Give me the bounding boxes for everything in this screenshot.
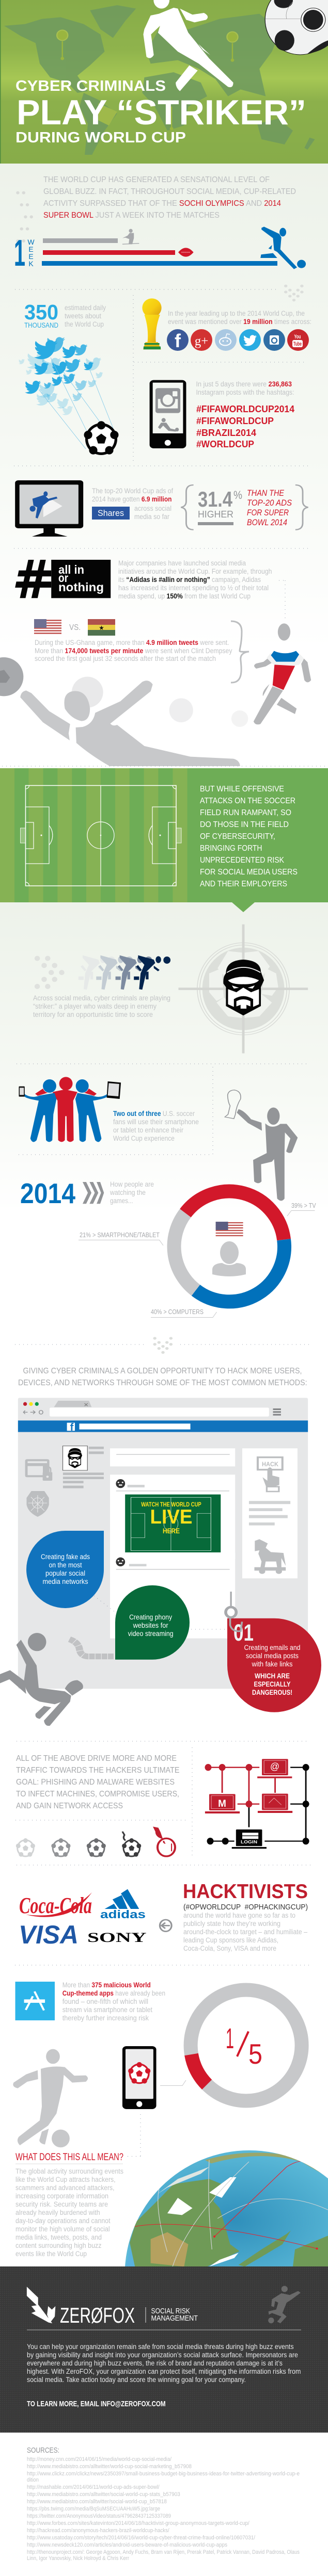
- donut chart: one fifth: [191, 1990, 302, 2101]
- title: PLAY “STRIKER”: [17, 93, 306, 132]
- text: laptop labels: LOGIN: [241, 1840, 257, 1844]
- callout: fake links: social media posts: [246, 1652, 299, 1660]
- callout: fake links: [227, 1618, 321, 1712]
- text: instagram hashtags: #BRAZIL2014: [196, 428, 256, 438]
- bar chart: 1 week comparison: 1: [14, 233, 25, 274]
- stat: 350 thousand: THOUSAND: [24, 321, 58, 329]
- stat: 350 thousand: [24, 300, 106, 329]
- text: top-20 ads shares: 2014 have gotten 6.9 million: [92, 495, 171, 503]
- bracket: [231, 621, 249, 683]
- callout: 31.4% higher: TOP-20 ADS: [247, 498, 292, 508]
- title: DURING WORLD CUP: [15, 129, 186, 146]
- panel: world cup buzz: [0, 164, 328, 770]
- text: offensive attacks: BUT WHILE OFFENSIVE: [200, 785, 284, 793]
- callout: phony websites: video streaming: [128, 1630, 174, 1638]
- text: ultimate goal: TO INFECT MACHINES, COMPROMISE USERS,: [16, 1790, 179, 1799]
- panel: zerofox footer: [0, 2266, 328, 2433]
- text: instagram hashtags: Instagram posts with the hashtags:: [196, 388, 294, 396]
- bar chart: 1 week comparison: [14, 226, 306, 274]
- callout: phony websites: Creating phony: [129, 1613, 172, 1621]
- text: malicious apps: [63, 1981, 165, 2022]
- logos: world cup sponsors: Coca-Cola: [19, 1893, 92, 1918]
- text: global activity: media links, tweets, posts, and: [15, 2233, 102, 2241]
- illustration: globe with attack lines: [119, 2146, 328, 2270]
- social media icons: g+: [195, 334, 208, 348]
- text: striker definition: [33, 994, 170, 1018]
- flag: united states: [216, 1222, 243, 1237]
- callout: 31.4% higher: THAN THE: [247, 488, 285, 498]
- panel: hero header: [0, 0, 328, 164]
- panel: sidebar ads: [242, 1448, 298, 1578]
- text: hacktivists: Coca-Cola, Sony, VISA and more: [183, 1945, 276, 1952]
- callout: fake links: DANGEROUS!: [252, 1689, 292, 1696]
- text: call to action: social media. Take action today and score the winning goal for your company.: [27, 2376, 246, 2384]
- text: offensive attacks: [200, 785, 298, 888]
- shares button: Shares: [98, 508, 124, 518]
- text: ultimate goal: AND GAIN NETWORK ACCESS: [16, 1802, 123, 1810]
- icon: soccer ball: [84, 421, 118, 455]
- text: adidas campaign: its “Adidas is #allin or nothing” campaign, Adidas: [118, 576, 261, 584]
- text: offensive attacks: ATTACKS ON THE SOCCER: [200, 797, 295, 805]
- text: ultimate goal: ALL OF THE ABOVE DRIVE MORE AND MORE: [16, 1754, 177, 1763]
- callout: fake links: with fake links: [252, 1660, 293, 1668]
- text: laptop labels: [218, 1761, 279, 1844]
- text: adidas campaign: has increased its internet spending to ½ of their total: [118, 584, 269, 592]
- logos: world cup sponsors: VISA: [19, 1920, 79, 1949]
- label: tv share: 39% > TV: [291, 1202, 316, 1209]
- text: global activity: content surrounding high buzz: [15, 2242, 102, 2249]
- text: call to action: [27, 2343, 301, 2384]
- heading: golden opportunity: [18, 1367, 307, 1387]
- callout: fake links: Creating emails and: [244, 1644, 301, 1651]
- logo: all in or nothing: or: [58, 571, 68, 585]
- text: us-ghana game: scored the first goal just 32 seconds after the start of the match: [35, 655, 216, 662]
- panel: sources: http://www.mediabistro.com/alltwitter/social-world-cup_b57818: [27, 2499, 167, 2505]
- logo: zerofox: SOCIAL RISK: [151, 2307, 190, 2315]
- illustration: flock of twitter birds lifting a ball: [19, 337, 118, 455]
- illustration: goalkeeper: [0, 657, 248, 770]
- stat: 2014: How people are: [110, 1180, 154, 1188]
- icon: falling player: [0, 1633, 83, 1726]
- icon: app store: [15, 1982, 55, 2020]
- text: call to action: You can help your organization remain safe from social media threats during high buzz events: [27, 2343, 294, 2351]
- text: global activity: day-to-day operations and cannot: [15, 2217, 111, 2225]
- icon: smartphone with instagram: [150, 380, 186, 448]
- bar chart: 1 week comparison: K: [28, 260, 34, 268]
- icon: person: [212, 1241, 246, 1276]
- icon: web shield: [26, 1491, 49, 1517]
- stat: 350 thousand: tweets about: [65, 312, 101, 320]
- panel: news feed post one: [110, 1448, 235, 1466]
- social media icons: [167, 329, 309, 351]
- text: two out of three: Two out of three U.S. soccer: [113, 1110, 195, 1117]
- donut chart: one fifth: 5: [248, 2038, 262, 2070]
- flag: united states: [34, 619, 61, 636]
- stat: 2014: [20, 1177, 154, 1209]
- icon: hacker avatar: [68, 1448, 82, 1468]
- icon: white kicking player: [143, 0, 233, 91]
- icon: trojan horse: [254, 1539, 286, 1574]
- text: global activity: security risk. Security teams are: [15, 2200, 108, 2208]
- intro text: THE WORLD CUP HAS GENERATED A SENSATIONAL LEVEL OF: [43, 175, 270, 184]
- icon: worm: [69, 1639, 114, 1657]
- callout: fake links: ESPECIALLY: [254, 1680, 290, 1688]
- logo: zerofox: ZERØFOX: [60, 2303, 135, 2327]
- text: hacktivists: publicly state how they’re working: [183, 1920, 280, 1927]
- heading: golden opportunity: GIVING CYBER CRIMINALS A GOLDEN OPPORTUNITY TO HACK MORE USERS,: [23, 1367, 302, 1375]
- text: offensive attacks: FOR SOCIAL MEDIA USERS: [200, 868, 298, 877]
- intro text: ACTIVITY SURPASSED THAT OF THE SOCHI OLYMPICS AND 2014: [43, 199, 281, 208]
- text: malicious apps: stream via smartphone or tablet: [63, 2006, 152, 2014]
- text: malicious apps: More than 375 malicious World: [63, 1981, 151, 1989]
- icon: kicking player: [13, 2049, 88, 2147]
- callout: fake ads: popular social: [45, 1569, 85, 1577]
- text: global activity: events like the World Cup: [15, 2250, 87, 2258]
- stat: 2014: games...: [110, 1197, 133, 1205]
- text: instagram hashtags: #FIFAWORLDCUP2014: [196, 404, 294, 414]
- text: hacktivists: HACKTIVISTS: [183, 1881, 308, 1903]
- panel: sources: http://www.mediabistro.com/alltwitter/world-cup-social-marketing_b57908: [27, 2464, 192, 2470]
- text: us-ghana game: More than 174,000 tweets per minute were sent when Clint Dempsey: [35, 647, 232, 655]
- icon: blue player: [260, 226, 306, 269]
- text: ultimate goal: GOAL: PHISHING AND MALWARE WEBSITES: [16, 1778, 175, 1787]
- map pins: [57, 30, 238, 130]
- callout: fake ads: media networks: [42, 1578, 88, 1585]
- label: smartphone tablet share: [79, 1231, 163, 1245]
- stat: 2014: 2014: [20, 1177, 75, 1209]
- text: offensive attacks: BRINGING FORTH: [200, 844, 262, 853]
- text: global activity: already heavily burdened with: [15, 2209, 100, 2216]
- text: offensive attacks: DO THOSE IN THE FIELD: [200, 820, 289, 829]
- logos: world cup sponsors: SONY: [87, 1930, 147, 1945]
- text: live stream ad: WATCH THE WORLD CUP: [141, 1501, 201, 1508]
- text: top-20 ads shares: media so far: [134, 513, 169, 521]
- text: striker definition: territory for an opportunistic time to score: [33, 1011, 153, 1018]
- panel: sources: [27, 2446, 300, 2562]
- icon: fishing hook: [226, 1592, 242, 1631]
- panel: sources: Linn, Igor Yanovskiy, Nick Holroyd & Chris Kerr: [27, 2555, 129, 2562]
- logo: all in or nothing: all in: [58, 563, 84, 576]
- intro text: GLOBAL BUZZ. IN FACT, THROUGHOUT SOCIAL MEDIA, CUP-RELATED: [43, 187, 296, 196]
- text: hacktivists: (#OPWORLDCUP #OPHACKINGCUP): [183, 1903, 308, 1911]
- icon: credit card lock: [25, 1459, 52, 1481]
- text: hack button: HACK: [262, 1461, 278, 1468]
- flag: ghana: [88, 619, 115, 636]
- icon: chevrons: [83, 1182, 104, 1204]
- panel: browser mockup: [18, 1398, 308, 1689]
- icon: american football: [178, 248, 194, 257]
- text: call to action: everywhere and during high buzz events, the risk of brand and reputation damage is at it’s: [27, 2359, 283, 2367]
- diagram: compromised network: [205, 1759, 309, 1849]
- icon: player holding trophy: [225, 1090, 298, 1201]
- flag: ghana: ★: [99, 624, 104, 631]
- donut chart: one fifth: 1: [226, 2022, 234, 2054]
- intro text: SUPER BOWL JUST A WEEK INTO THE MATCHES: [43, 211, 220, 220]
- panel: browser mockup: f: [70, 1422, 74, 1433]
- bar chart: 1 week comparison: E: [28, 245, 34, 253]
- social media icons: You: [294, 334, 301, 340]
- text: 19 million mentions: In the year leading up to the 2014 World Cup, the: [168, 310, 305, 317]
- logo: zerofox: MANAGEMENT: [151, 2314, 198, 2323]
- panel: sources: SOURCES:: [27, 2446, 59, 2455]
- text: global activity: The global activity surrounding events: [15, 2167, 123, 2175]
- icon: hacker in crosshair on soccer ball: [178, 925, 308, 1054]
- icon: soccer ball: [265, 0, 328, 55]
- text: adidas campaign: [118, 559, 272, 600]
- text: laptop labels: M: [218, 1799, 226, 1809]
- text: top-20 ads shares: The top-20 World Cup ads of: [92, 487, 173, 495]
- text: striker definition: Across social media, cyber criminals are playing: [33, 994, 170, 1002]
- text: offensive attacks: OF CYBERSECURITY,: [200, 832, 275, 841]
- text: 19 million mentions: event was mentioned over 19 million times across:: [168, 318, 311, 326]
- callout: 31.4% higher: [181, 485, 308, 530]
- text: global activity: scammers and advanced attackers,: [15, 2184, 115, 2192]
- text: hacktivists: leading Cup sponsors like Adidas,: [183, 1936, 278, 1944]
- intro text: [43, 175, 296, 220]
- callout: fake ads: Creating fake ads: [41, 1553, 90, 1561]
- panel: sources: https://pbs.twimg.com/media/BqSuMSECUAAHuW5.jpg:large: [27, 2506, 160, 2512]
- text: instagram hashtags: [196, 380, 294, 449]
- panel: sources: http://www.clickz.com/clickz/news/2350397/small-business-budget-big-business-ideas-for-twitter-advertising-world-cup-e: [27, 2471, 300, 2477]
- shares button: [92, 507, 130, 520]
- label: computers share: 40% > COMPUTERS: [151, 1308, 204, 1316]
- panel: sources: dition: [27, 2477, 39, 2483]
- pitch stripes: [0, 768, 187, 902]
- text: adidas campaign: media spend, up 150% from the last World Cup: [118, 592, 251, 600]
- text: global activity: like the World Cup attracts hackers,: [15, 2176, 116, 2183]
- text: 19 million mentions: [168, 310, 311, 326]
- heading: what does this all mean: WHAT DOES THIS ALL MEAN?: [15, 2152, 123, 2163]
- text: malicious apps: found – one-fifth of which will: [63, 1998, 148, 2005]
- text: global activity: [15, 2167, 123, 2258]
- logo: all in or nothing: [15, 560, 111, 598]
- stat: 350 thousand: estimated daily: [65, 304, 106, 312]
- icon: tv with player: [15, 480, 83, 537]
- panel: sources: http://mashable.com/2014/06/11/world-cup-ads-super-bowl/: [27, 2484, 160, 2490]
- text: ultimate goal: [16, 1754, 180, 1810]
- callout: fake ads: [26, 1531, 104, 1608]
- panel: news feed post two with fake ad: [110, 1475, 235, 1559]
- callout: fake links: 01: [233, 1619, 254, 1646]
- callout: 31.4% higher: HIGHER: [198, 509, 233, 520]
- text: malicious apps: thereby further increasing risk: [63, 2014, 149, 2022]
- text: two out of three: or tablet to enhance their: [113, 1126, 183, 1134]
- icon: red soccer ball: [128, 2062, 150, 2084]
- arrow: hacktivists target sponsors: [160, 1920, 171, 1932]
- social media icons: f: [175, 330, 181, 351]
- stat: 2014: watching the: [110, 1189, 146, 1196]
- text: instagram hashtags: #FIFAWORLDCUP: [196, 416, 274, 426]
- text: global activity: increasing corporate information: [15, 2192, 108, 2200]
- icon row: balls turning into bombs: [16, 1827, 175, 1857]
- text: email contact: TO LEARN MORE, EMAIL INFO@ZEROFOX.COM: [27, 2400, 166, 2408]
- donut chart: how people watch: [79, 1191, 316, 1318]
- decorative chevron dots: [35, 956, 65, 989]
- text: offensive attacks: FIELD RUN RAMPANT, SO: [200, 808, 291, 817]
- pitch markings: [21, 785, 181, 886]
- text: top-20 ads shares: [92, 487, 173, 521]
- text: live stream ad: [141, 1501, 201, 1535]
- text: call to action: highest. With ZeroFOX, your organization can protect itself, mitigating the information risks from: [27, 2368, 301, 2375]
- callout: fake links: WHICH ARE: [255, 1672, 290, 1680]
- text: global activity: monitor the high volume of social: [15, 2225, 110, 2233]
- icon: skier: [122, 229, 139, 244]
- label: tv share: [287, 1202, 316, 1216]
- logo: adidas: adidas: [100, 1908, 146, 1921]
- text: adidas campaign: Major companies have launched social media: [118, 559, 246, 567]
- bar chart: 1 week comparison: W: [27, 238, 35, 246]
- callout: 31.4% higher: FOR SUPER: [247, 508, 289, 517]
- icon: fans with devices: [19, 1077, 121, 1142]
- panel: sources: http://www.forbes.com/sites/katevinton/2014/06/18/hacktivist-group-anonymous-targets-world-cup/: [27, 2520, 250, 2526]
- text: offensive attacks: AND THEIR EMPLOYERS: [200, 880, 287, 888]
- title: [15, 78, 306, 146]
- text: two out of three: fans will use their smartphone: [113, 1118, 199, 1126]
- panel: sources: https://twitter.com/AnonymousVideo/status/479628437125337089: [27, 2513, 171, 2519]
- panel: news feed post three: [110, 1552, 235, 1639]
- arrow: field pointer: [232, 902, 255, 912]
- text: live stream ad: LIVE: [150, 1506, 192, 1528]
- heading: golden opportunity: DEVICES, AND NETWORKS THROUGH SOME OF THE MOST COMMON METHODS:: [18, 1379, 307, 1387]
- text: two out of three: World Cup experience: [113, 1135, 175, 1142]
- text: instagram hashtags: #WORLDCUP: [196, 439, 254, 449]
- label: smartphone tablet share: 21% > SMARTPHONE/TABLET: [80, 1231, 160, 1239]
- decorative chevron dots: [16, 191, 33, 242]
- callout: phony websites: websites for: [133, 1622, 168, 1629]
- text: live stream ad: HERE: [163, 1527, 180, 1535]
- icon: fading strikers: [79, 955, 170, 990]
- text: us-ghana game: During the US-Ghana game, more than 4.9 million tweets were sent.: [35, 639, 229, 646]
- text: hacktivists: around the world have gone so far as to: [183, 1911, 295, 1919]
- social media icons: Tube: [293, 341, 302, 347]
- panel: sources: http://www.usatoday.com/story/tech/2014/06/16/world-cup-cyber-threat-crime-fraud-online/10607031/: [27, 2535, 256, 2541]
- text: striker definition: “striker:” a player who waits deep in enemy: [33, 1002, 157, 1010]
- callout: 31.4% higher: 31.4: [198, 487, 233, 511]
- callout: fake ads: on the most: [49, 1561, 82, 1569]
- text: adidas campaign: initiatives around the World Cup. For example, through: [118, 568, 272, 575]
- text: laptop labels: @: [270, 1761, 279, 1772]
- text: hacktivists: around-the-clock to target – and humiliate –: [183, 1928, 307, 1936]
- text: instagram hashtags: In just 5 days there were 236,863: [196, 380, 292, 388]
- world map: [4, 5, 315, 155]
- panel: sources: http://www.newsdeck120.com/articles/android-users-beware-of-malicious-world-cup-apps: [27, 2542, 227, 2548]
- text: malicious apps: Cup-themed apps have already been: [63, 1989, 165, 1997]
- connector: [160, 2080, 186, 2085]
- icon: footer player: [268, 2286, 301, 2323]
- text: call to action: by gaining visibility and insight into your organization’s social attack surface. Impersonators are: [27, 2351, 298, 2359]
- text: us-ghana game: [35, 639, 232, 662]
- text: offensive attacks: UNPRECEDENTED RISK: [200, 856, 285, 865]
- icon: us player: [254, 623, 311, 724]
- bar chart: 1 week comparison: E: [28, 252, 34, 261]
- panel: soccer field: [0, 768, 328, 902]
- logo: all in or nothing: nothing: [58, 580, 104, 594]
- stat: 350 thousand: the World Cup: [65, 320, 104, 328]
- callout: phony websites: [115, 1585, 190, 1660]
- text: two out of three: [113, 1110, 199, 1142]
- panel: sources: http://www.mediabistro.com/alltwitter/social-world-cup-stats_b57903: [27, 2491, 180, 2498]
- stat: 350 thousand: 350: [24, 300, 58, 324]
- text: hacktivists: [183, 1881, 308, 1952]
- logo: zerofox: [27, 2287, 198, 2327]
- text: ultimate goal: TRAFFIC TOWARDS THE HACKERS ULTIMATE: [16, 1766, 180, 1775]
- logos: world cup sponsors: [19, 1889, 147, 1949]
- icon: phone with ball: [122, 2046, 157, 2109]
- text: top-20 ads shares: across social: [134, 505, 171, 512]
- text: vs: VS.: [69, 623, 81, 632]
- callout: 31.4% higher: %: [233, 489, 242, 501]
- icon: world cup trophy: [142, 298, 162, 349]
- callout: 31.4% higher: BOWL 2014: [247, 517, 287, 527]
- panel: sources: http://money.cnn.com/2014/06/15/media/world-cup-social-media/: [27, 2456, 172, 2462]
- panel: striker and target: [0, 902, 328, 1212]
- title: CYBER CRIMINALS: [15, 78, 166, 94]
- logo: adidas: [100, 1889, 146, 1921]
- panel: sources: http://hackread.com/anonymous-hackers-brazil-worldcup-hacks/: [27, 2528, 170, 2534]
